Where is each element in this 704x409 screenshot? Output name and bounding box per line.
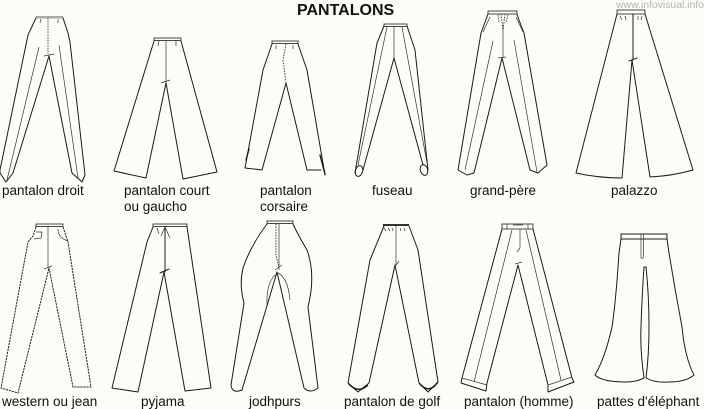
garment: fuseau bbox=[354, 24, 429, 198]
garment: pantalon droit bbox=[0, 16, 85, 198]
garment: pantalon corsaire: corsaire bbox=[260, 199, 308, 214]
garment: grand-père: grand-père bbox=[470, 183, 536, 198]
garment: pantalon court ou gaucho: pantalon court bbox=[124, 183, 210, 198]
garment: pattes d'éléphant bbox=[595, 234, 700, 409]
garment: jodhpurs: jodhpurs bbox=[248, 394, 301, 409]
garment: pantalon de golf bbox=[344, 224, 440, 409]
garment: pantalon (homme) bbox=[461, 224, 574, 409]
garment: fuseau: fuseau bbox=[372, 183, 413, 198]
garment: pantalon droit: pantalon droit bbox=[2, 183, 84, 198]
garment: western ou jean: western ou jean bbox=[1, 394, 97, 409]
garment: western ou jean bbox=[1, 224, 97, 409]
garment: grand-père bbox=[458, 11, 547, 198]
garment: pyjama bbox=[112, 224, 211, 409]
garment: palazzo: palazzo bbox=[611, 183, 658, 198]
garment: pantalon corsaire: pantalon bbox=[260, 183, 312, 198]
garment: pantalon court ou gaucho bbox=[114, 38, 217, 214]
garment: pyjama: pyjama bbox=[141, 394, 185, 409]
garment: pattes d'éléphant: pattes d'éléphant bbox=[597, 394, 700, 409]
garment: pantalon court ou gaucho: ou gaucho bbox=[124, 199, 187, 214]
title: PANTALONS bbox=[297, 2, 395, 19]
garment: jodhpurs bbox=[231, 221, 318, 409]
garment: palazzo bbox=[576, 10, 693, 198]
garment: pantalon (homme): pantalon (homme) bbox=[464, 394, 574, 409]
garment: pantalon de golf: pantalon de golf bbox=[344, 394, 440, 409]
garment: pantalon corsaire bbox=[245, 41, 325, 214]
